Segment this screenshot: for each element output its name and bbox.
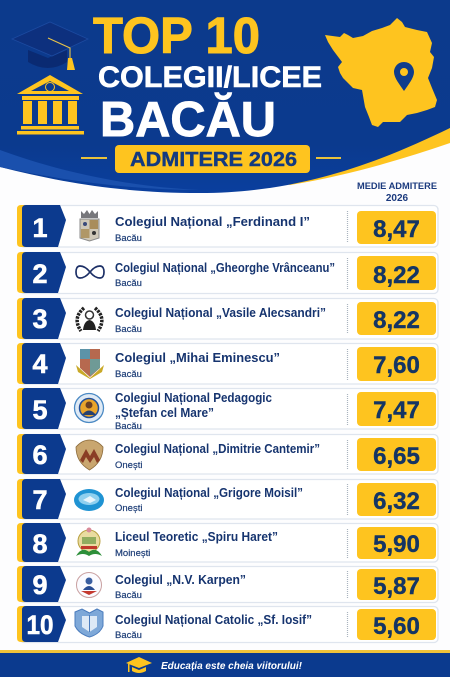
row 6 — [17, 434, 438, 474]
row 4: 4 — [32, 349, 48, 379]
logo 7 — [74, 489, 104, 511]
row 3 — [17, 298, 438, 339]
row 8: Liceul Teoretic „Spiru Haret” — [115, 530, 278, 544]
icon: graduation cap — [12, 22, 88, 70]
row 5: Bacău — [115, 421, 142, 432]
row 1: 1 — [32, 213, 48, 243]
header banner — [0, 0, 450, 193]
row 5: Colegiul Național Pedagogic — [115, 391, 272, 405]
column heading: MEDIE ADMITERE — [357, 181, 437, 191]
title — [93, 7, 322, 147]
row 6: Onești — [115, 460, 142, 471]
logo 3 — [77, 308, 102, 331]
row 3: Colegiul Național „Vasile Alecsandri” — [115, 306, 326, 320]
logo 5 — [74, 394, 104, 422]
logo 6 — [76, 440, 103, 470]
row 6: 6,65 — [373, 443, 420, 470]
icon: institution building — [17, 75, 84, 134]
row 2 — [17, 252, 438, 294]
row 8 — [17, 523, 438, 562]
row 8: Moinești — [115, 548, 150, 559]
row 10 — [17, 606, 438, 642]
row 9: Bacău — [115, 590, 142, 601]
row 1: Colegiul Național „Ferdinand I” — [115, 215, 310, 229]
row 4: Bacău — [115, 369, 142, 380]
logo 1 — [80, 210, 99, 241]
row 3: Bacău — [115, 324, 142, 335]
row 8: 8 — [32, 529, 48, 559]
logo 2 — [76, 266, 104, 278]
column heading: 2026 — [386, 193, 409, 204]
row 5 — [17, 388, 438, 432]
subtitle pill: ADMITERE 2026 — [130, 149, 297, 171]
map of Bacău county with pin — [325, 18, 437, 127]
row 2: Bacău — [115, 278, 142, 289]
subtitle pill — [81, 145, 341, 173]
column heading — [357, 181, 437, 204]
row 4 — [17, 343, 438, 384]
row 4: 7,60 — [373, 352, 420, 379]
row 2: 2 — [32, 259, 48, 289]
row 1 — [17, 205, 438, 247]
footer band — [0, 650, 450, 677]
logo 10 — [75, 609, 103, 637]
row 10: 5,60 — [373, 613, 420, 640]
row 2: 8,22 — [373, 262, 420, 289]
row 5: 5 — [32, 395, 48, 425]
row 7 — [17, 479, 438, 519]
row 10: 10 — [26, 610, 54, 640]
row 2: Colegiul Național „Gheorghe Vrânceanu” — [115, 261, 335, 275]
row 7: 7 — [32, 485, 48, 515]
row 4: Colegiul „Mihai Eminescu” — [115, 351, 280, 365]
row 5: 7,47 — [373, 397, 420, 424]
row 6: 6 — [32, 440, 48, 470]
row 3: 8,22 — [373, 307, 420, 334]
title: TOP 10 — [93, 7, 260, 64]
row 5: „Ștefan cel Mare” — [115, 406, 214, 420]
icon: footer graduation cap — [126, 657, 152, 673]
row 7: Onești — [115, 503, 142, 514]
row 8: 5,90 — [373, 531, 420, 558]
title: COLEGII/LICEE — [98, 61, 322, 94]
row 1: Bacău — [115, 233, 142, 244]
logo 4 — [76, 349, 104, 379]
title: BACĂU — [100, 93, 276, 147]
row 9: 9 — [32, 570, 48, 600]
footer band: Educația este cheia viitorului! — [161, 660, 302, 672]
row 10: Colegiul Național Catolic „Sf. Iosif” — [115, 613, 312, 627]
row 9: Colegiul „N.V. Karpen” — [115, 573, 246, 587]
row 10: Bacău — [115, 630, 142, 641]
row 9: 5,87 — [373, 573, 420, 600]
row 6: Colegiul Național „Dimitrie Cantemir” — [115, 442, 320, 456]
row 7: Colegiul Național „Grigore Moisil” — [115, 486, 303, 500]
row 3: 3 — [32, 304, 48, 334]
row 1: 8,47 — [373, 216, 420, 243]
logo 8 — [76, 528, 102, 556]
row 7: 6,32 — [373, 488, 420, 515]
logo 9 — [76, 572, 102, 598]
row 9 — [17, 566, 438, 602]
